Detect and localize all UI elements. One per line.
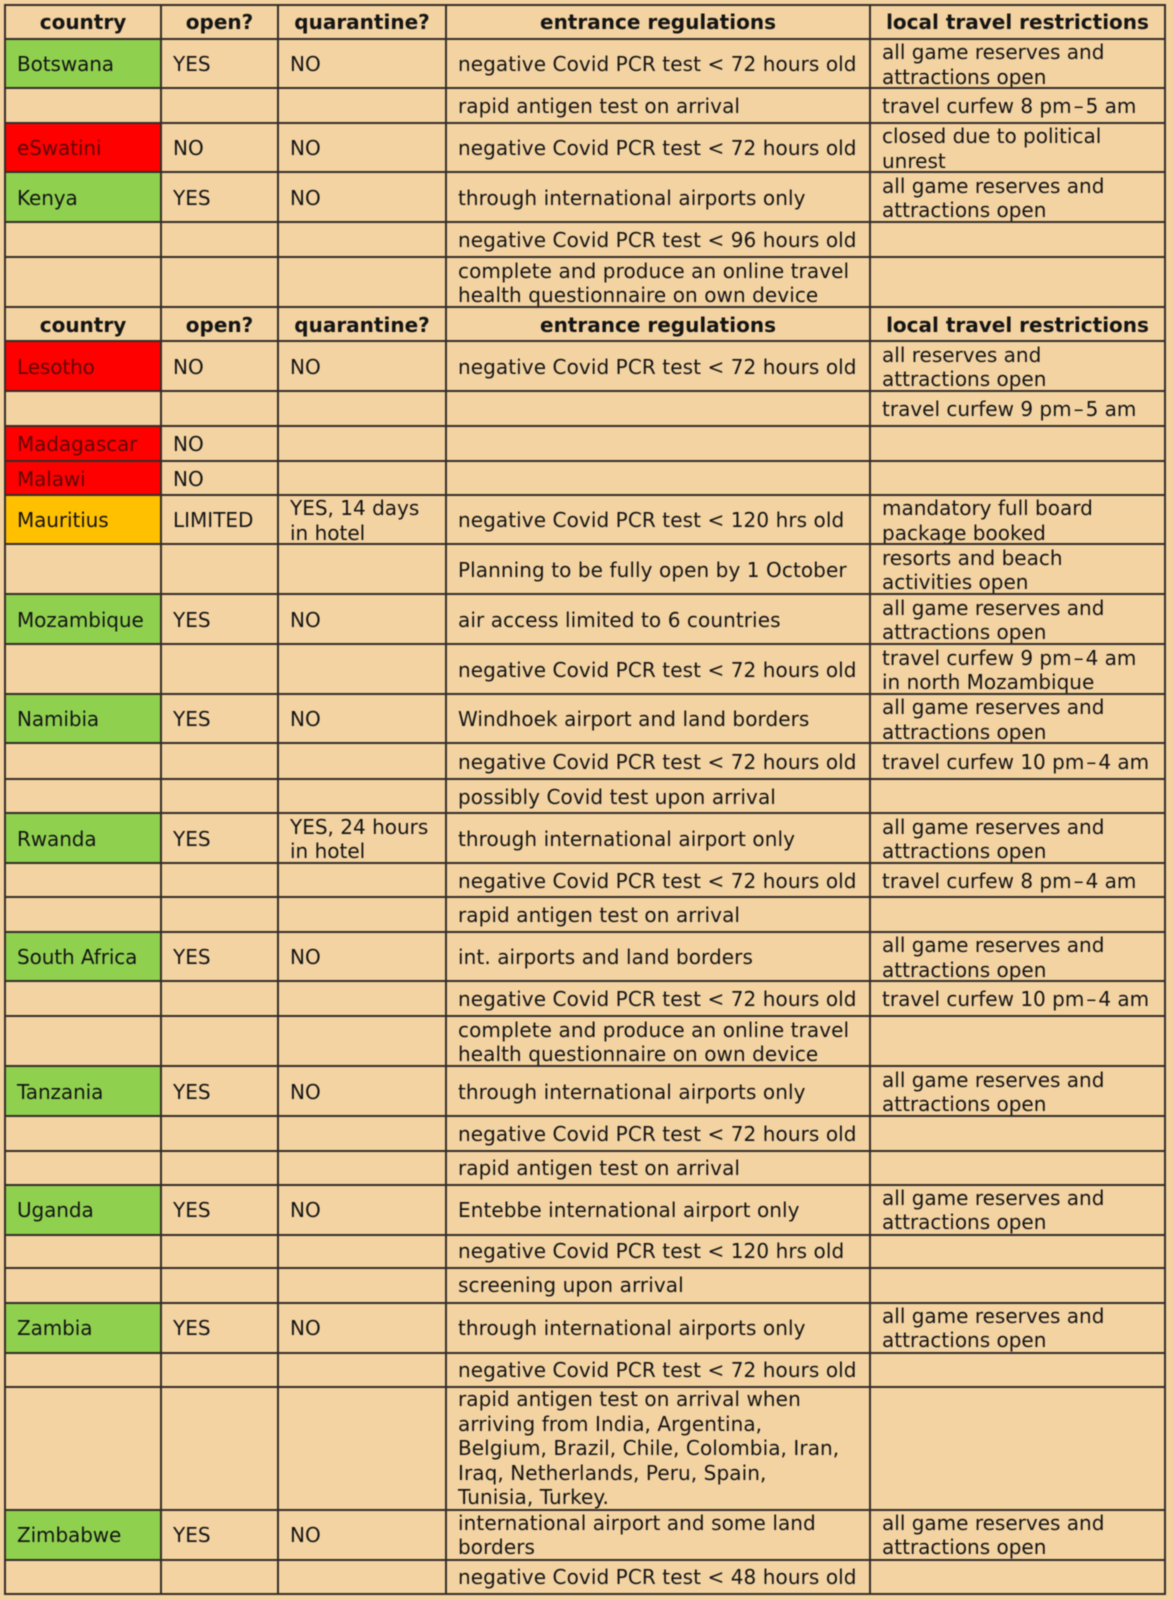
row: Mozambique 2 bbox=[4, 643, 1166, 695]
header: country: country bbox=[40, 313, 126, 337]
open: LIMITED bbox=[173, 508, 253, 532]
restriction bbox=[882, 40, 1104, 88]
country: South Africa bbox=[6, 933, 160, 980]
country: Mauritius: Mauritius bbox=[17, 508, 109, 532]
row: Namibia bbox=[4, 693, 1166, 744]
row: Kenya 2 bbox=[4, 221, 1166, 258]
quarantine: NO bbox=[290, 1198, 321, 1222]
row: Kenya bbox=[4, 171, 1166, 223]
country: Zambia: Zambia bbox=[17, 1316, 92, 1340]
open: YES bbox=[173, 52, 211, 76]
open: YES bbox=[173, 1198, 211, 1222]
regulation: rapid antigen test on arrival when bbox=[458, 1387, 801, 1411]
country: Tanzania bbox=[6, 1067, 160, 1115]
header: entrance regulations: entrance regulations bbox=[540, 10, 776, 34]
row: Uganda 3 bbox=[4, 1267, 1166, 1304]
row: Rwanda 3 bbox=[4, 896, 1166, 933]
regulation: negative Covid PCR test < 72 hours old bbox=[458, 1122, 857, 1146]
row: Tanzania 3 bbox=[4, 1150, 1166, 1186]
header: country: country bbox=[40, 10, 126, 34]
quarantine: NO bbox=[290, 355, 321, 379]
row: Rwanda 2 bbox=[4, 862, 1166, 898]
country: eSwatini: eSwatini bbox=[17, 136, 101, 160]
regulation: through international airports only bbox=[458, 1080, 806, 1104]
restriction: all game reserves and bbox=[882, 1186, 1104, 1210]
regulation: complete and produce an online travel bbox=[458, 1018, 849, 1042]
restriction: attractions open bbox=[882, 1092, 1046, 1116]
quarantine: NO bbox=[290, 707, 321, 731]
open: YES bbox=[173, 1080, 211, 1104]
country: Rwanda bbox=[6, 814, 160, 862]
restriction bbox=[882, 1186, 1104, 1234]
header: open: open? bbox=[186, 313, 253, 337]
regulation: possibly Covid test upon arrival bbox=[458, 785, 776, 809]
regulation: negative Covid PCR test < 72 hours old bbox=[458, 750, 857, 774]
regulation: negative Covid PCR test < 72 hours old bbox=[458, 869, 857, 893]
regulation: screening upon arrival bbox=[458, 1273, 684, 1297]
restriction: travel curfew 9 pm–5 am bbox=[882, 397, 1136, 421]
restriction: all game reserves and bbox=[882, 695, 1104, 719]
restriction bbox=[882, 1511, 1104, 1560]
country: Zambia bbox=[6, 1304, 160, 1352]
regulation: complete and produce an online travel bbox=[458, 259, 849, 283]
restriction: unrest bbox=[882, 148, 946, 172]
restriction: attractions open bbox=[882, 839, 1046, 863]
regulation: international airport and some land bbox=[458, 1511, 816, 1535]
country: Kenya bbox=[6, 173, 160, 221]
country: Uganda bbox=[6, 1186, 160, 1234]
country: Madagascar bbox=[6, 427, 160, 460]
regulation: health questionnaire on own device bbox=[458, 1042, 818, 1066]
restriction bbox=[882, 815, 1104, 863]
row: Zambia 2 bbox=[4, 1352, 1166, 1388]
row: Malawi bbox=[4, 460, 1166, 496]
row: Madagascar bbox=[4, 425, 1166, 462]
open: NO bbox=[173, 136, 204, 160]
country: Kenya: Kenya bbox=[17, 186, 78, 210]
header: open: open? bbox=[186, 10, 253, 34]
regulation: negative Covid PCR test < 120 hrs old bbox=[458, 1239, 844, 1263]
restriction bbox=[882, 343, 1046, 391]
regulation: rapid antigen test on arrival bbox=[458, 94, 740, 118]
header: quarantine: quarantine? bbox=[294, 313, 430, 337]
row: Zambia 3 bbox=[4, 1386, 1166, 1511]
restriction bbox=[882, 695, 1104, 744]
regulation: negative Covid PCR test < 72 hours old bbox=[458, 52, 857, 76]
row: South Africa 2 bbox=[4, 980, 1166, 1017]
row: Lesotho bbox=[4, 340, 1166, 392]
restriction bbox=[882, 1068, 1104, 1116]
row: Kenya 3 bbox=[4, 256, 1166, 308]
regulation: borders bbox=[458, 1535, 535, 1559]
country: Zimbabwe: Zimbabwe bbox=[17, 1523, 121, 1547]
open: YES bbox=[173, 186, 211, 210]
regulation bbox=[458, 1511, 816, 1559]
country: Namibia: Namibia bbox=[17, 707, 99, 731]
country: Tanzania: Tanzania bbox=[17, 1080, 103, 1104]
regulation: negative Covid PCR test < 96 hours old bbox=[458, 228, 857, 252]
regulation: negative Covid PCR test < 120 hrs old bbox=[458, 508, 844, 532]
restriction: all game reserves and bbox=[882, 1511, 1104, 1535]
restriction: travel curfew 10 pm–4 am bbox=[882, 750, 1149, 774]
restriction: travel curfew 8 pm–4 am bbox=[882, 869, 1136, 893]
regulation: Belgium, Brazil, Chile, Colombia, Iran, bbox=[458, 1436, 839, 1460]
row: Uganda 2 bbox=[4, 1234, 1166, 1269]
country: Madagascar: Madagascar bbox=[17, 432, 137, 456]
row: Mauritius 2 bbox=[4, 543, 1166, 595]
restriction: attractions open bbox=[882, 958, 1046, 982]
country: Namibia bbox=[6, 695, 160, 742]
regulation: Iraq, Netherlands, Peru, Spain, bbox=[458, 1461, 766, 1485]
restriction: all game reserves and bbox=[882, 1304, 1104, 1328]
restriction: mandatory full board bbox=[882, 496, 1093, 520]
regulation: health questionnaire on own device bbox=[458, 283, 818, 307]
regulation: through international airports only bbox=[458, 186, 806, 210]
quarantine: YES, 14 days bbox=[290, 496, 419, 520]
restriction bbox=[882, 596, 1104, 644]
quarantine: in hotel bbox=[290, 839, 365, 863]
quarantine: NO bbox=[290, 1080, 321, 1104]
restriction bbox=[882, 646, 1136, 694]
restriction: attractions open bbox=[882, 367, 1046, 391]
regulation: Tunisia, Turkey. bbox=[458, 1485, 609, 1509]
open: YES bbox=[173, 1523, 211, 1547]
regulation: int. airports and land borders bbox=[458, 945, 753, 969]
country: Botswana bbox=[6, 40, 160, 87]
restriction: attractions open bbox=[882, 1328, 1046, 1352]
restriction: resorts and beach bbox=[882, 546, 1062, 570]
regulation bbox=[457, 1387, 839, 1510]
restriction: all game reserves and bbox=[882, 1068, 1104, 1092]
row: Mauritius bbox=[4, 494, 1166, 545]
regulation bbox=[458, 259, 849, 307]
country: Malawi: Malawi bbox=[17, 467, 86, 491]
quarantine bbox=[290, 496, 420, 544]
open: NO bbox=[173, 355, 204, 379]
header row 2 bbox=[4, 306, 1166, 342]
restriction bbox=[882, 496, 1093, 544]
restriction: in north Mozambique bbox=[882, 670, 1094, 694]
open: YES bbox=[173, 945, 211, 969]
quarantine: YES, 24 hours bbox=[290, 815, 428, 839]
row: South Africa bbox=[4, 931, 1166, 982]
restriction bbox=[882, 1304, 1104, 1352]
restriction: all game reserves and bbox=[882, 174, 1104, 198]
row: Mozambique bbox=[4, 593, 1166, 645]
regulation: Planning to be fully open by 1 October bbox=[458, 558, 847, 582]
header: local travel restrictions: local travel restrictions bbox=[886, 313, 1149, 337]
open: NO bbox=[173, 467, 204, 491]
quarantine: NO bbox=[290, 1523, 321, 1547]
regulation bbox=[458, 1018, 849, 1066]
regulation: Entebbe international airport only bbox=[458, 1198, 800, 1222]
row: South Africa 3 bbox=[4, 1015, 1166, 1067]
regulation: air access limited to 6 countries bbox=[458, 608, 781, 632]
restriction bbox=[882, 124, 1101, 172]
restriction: attractions open bbox=[882, 1535, 1046, 1559]
quarantine: in hotel bbox=[290, 520, 365, 544]
country: Mozambique bbox=[6, 595, 160, 643]
country: Botswana: Botswana bbox=[17, 52, 114, 76]
quarantine bbox=[290, 815, 428, 863]
header row 1 bbox=[4, 4, 1166, 40]
country: Zimbabwe bbox=[6, 1511, 160, 1559]
country: Mauritius bbox=[6, 496, 160, 543]
restriction: travel curfew 9 pm–4 am bbox=[882, 646, 1136, 670]
restriction: package booked bbox=[882, 520, 1046, 544]
country: Mozambique: Mozambique bbox=[17, 608, 144, 632]
regulation: rapid antigen test on arrival bbox=[458, 903, 740, 927]
row: Lesotho 2 bbox=[4, 390, 1166, 427]
restriction: attractions open bbox=[882, 620, 1046, 644]
quarantine: NO bbox=[290, 186, 321, 210]
row: Botswana 2 bbox=[4, 87, 1166, 124]
row: Botswana bbox=[4, 38, 1166, 89]
country: eSwatini bbox=[6, 124, 160, 171]
restriction: all game reserves and bbox=[882, 815, 1104, 839]
restriction bbox=[882, 174, 1104, 222]
regulation: negative Covid PCR test < 72 hours old bbox=[458, 658, 857, 682]
country: Lesotho: Lesotho bbox=[17, 355, 95, 379]
country: Lesotho bbox=[6, 342, 160, 390]
regulation: negative Covid PCR test < 48 hours old bbox=[458, 1565, 857, 1589]
quarantine: NO bbox=[290, 945, 321, 969]
regulation: arriving from India, Argentina, bbox=[458, 1412, 762, 1436]
country: Uganda: Uganda bbox=[17, 1198, 94, 1222]
restriction: all game reserves and bbox=[882, 933, 1104, 957]
row: Namibia 3 bbox=[4, 778, 1166, 814]
row: eSwatini bbox=[4, 122, 1166, 173]
open: YES bbox=[173, 707, 211, 731]
header: entrance regulations: entrance regulations bbox=[540, 313, 776, 337]
row: Zimbabwe bbox=[4, 1509, 1166, 1561]
row: Namibia 2 bbox=[4, 742, 1166, 780]
restriction: attractions open bbox=[882, 198, 1046, 222]
regulation: negative Covid PCR test < 72 hours old bbox=[458, 355, 857, 379]
regulation: through international airport only bbox=[458, 827, 795, 851]
restriction bbox=[882, 546, 1062, 594]
quarantine: NO bbox=[290, 608, 321, 632]
open: YES bbox=[173, 608, 211, 632]
row: Tanzania bbox=[4, 1065, 1166, 1117]
restriction: attractions open bbox=[882, 64, 1046, 88]
header: quarantine: quarantine? bbox=[294, 10, 430, 34]
row: Zambia bbox=[4, 1302, 1166, 1354]
row: Uganda bbox=[4, 1184, 1166, 1236]
row: Rwanda bbox=[4, 812, 1166, 864]
restriction bbox=[882, 933, 1104, 982]
regulation: through international airports only bbox=[458, 1316, 806, 1340]
restriction: closed due to political bbox=[882, 124, 1101, 148]
restriction: attractions open bbox=[882, 720, 1046, 744]
quarantine: NO bbox=[290, 1316, 321, 1340]
restriction: all game reserves and bbox=[882, 596, 1104, 620]
restriction: travel curfew 10 pm–4 am bbox=[882, 987, 1149, 1011]
quarantine: NO bbox=[290, 52, 321, 76]
regulation: negative Covid PCR test < 72 hours old bbox=[458, 136, 857, 160]
quarantine: NO bbox=[290, 136, 321, 160]
regulation: rapid antigen test on arrival bbox=[458, 1156, 740, 1180]
restriction: travel curfew 8 pm–5 am bbox=[882, 94, 1136, 118]
restriction: all reserves and bbox=[882, 343, 1041, 367]
regulation: negative Covid PCR test < 72 hours old bbox=[458, 987, 857, 1011]
country: Rwanda: Rwanda bbox=[17, 827, 97, 851]
restriction: all game reserves and bbox=[882, 40, 1104, 64]
open: YES bbox=[173, 827, 211, 851]
regulation: negative Covid PCR test < 72 hours old bbox=[458, 1358, 857, 1382]
row: Zimbabwe 2 bbox=[4, 1559, 1166, 1595]
header: local travel restrictions: local travel restrictions bbox=[886, 10, 1149, 34]
country: Malawi bbox=[6, 462, 160, 494]
open: YES bbox=[173, 1316, 211, 1340]
country: South Africa: South Africa bbox=[17, 945, 137, 969]
restriction: activities open bbox=[882, 570, 1028, 594]
regulation: Windhoek airport and land borders bbox=[458, 707, 809, 731]
restriction: attractions open bbox=[882, 1210, 1046, 1234]
row: Tanzania 2 bbox=[4, 1115, 1166, 1152]
open: NO bbox=[173, 432, 204, 456]
